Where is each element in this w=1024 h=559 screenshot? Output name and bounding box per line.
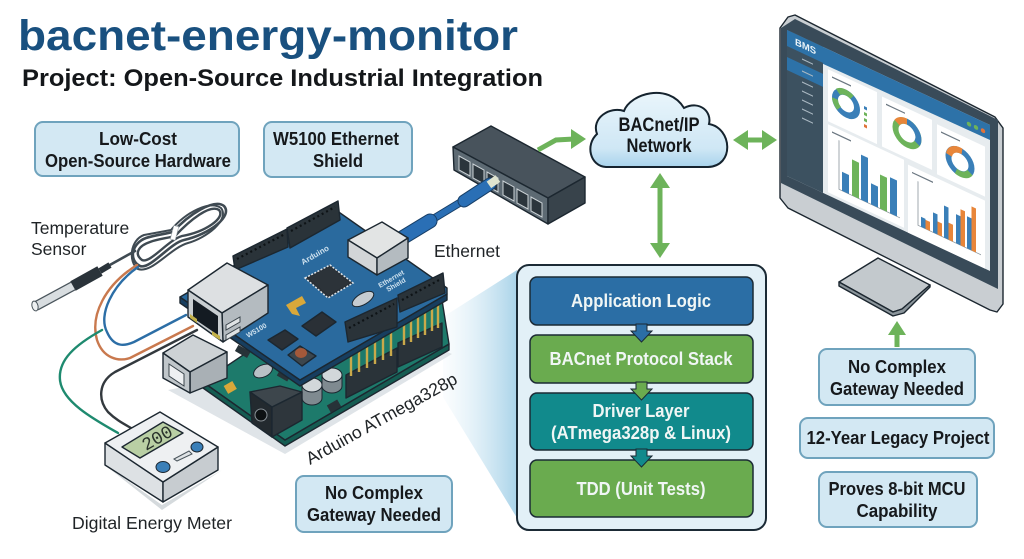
- bar chart 2: [908, 165, 985, 269]
- sensor wires: [60, 265, 197, 433]
- callout: no gateway (right): [819, 349, 975, 405]
- arrow: cloud to stack: [650, 173, 670, 258]
- cloud: BACnet/IP network: [590, 93, 727, 167]
- small RJ45 jack on shield: [348, 222, 408, 275]
- lower pin headers: [346, 323, 442, 398]
- label: Ethernet: Ethernet: [434, 241, 500, 261]
- callout: 8-bit MCU: Capability: [856, 500, 938, 521]
- callout: low-cost hardware: Low-Cost: [99, 128, 177, 149]
- layer: driver layer: [530, 393, 753, 450]
- callout: low-cost hardware: Open-Source Hardware: [45, 150, 231, 171]
- icon: digital energy meter: [101, 412, 222, 510]
- label: digital energy meter: Digital Energy Meter: [72, 513, 232, 533]
- label: temperature sensor: Sensor: [31, 239, 87, 259]
- layer: application logic: [530, 277, 753, 325]
- blue Ethernet cable: [402, 199, 466, 238]
- icon: network switch: [453, 126, 585, 224]
- callout: no gateway (bottom): Gateway Needed: [307, 504, 441, 525]
- bar chart 1: [828, 124, 904, 228]
- callout: 8-bit MCU: [819, 472, 977, 527]
- shield board: [180, 208, 447, 386]
- label: Arduino ATmega328p: Arduino ATmega328p: [302, 369, 461, 468]
- arrow: switch to cloud: [538, 129, 586, 150]
- donut panel 1: [828, 69, 877, 144]
- layer: driver layer: Driver Layer: [592, 400, 690, 421]
- silkscreen: [246, 244, 407, 340]
- donut panel 3: [937, 124, 985, 197]
- callout: no gateway (right): Gateway Needed: [830, 378, 964, 399]
- bezel: [781, 19, 998, 289]
- panel: software stack: [517, 265, 766, 530]
- callout: 8-bit MCU: Proves 8-bit MCU: [828, 478, 966, 499]
- subtitle: Project: Open-Source Industrial Integration: [22, 65, 543, 92]
- callout: W5100 shield: Shield: [313, 150, 363, 171]
- layer: BACnet protocol stack: [530, 335, 753, 383]
- callout: no gateway (bottom): [296, 476, 452, 532]
- screen: BMS: [795, 37, 816, 58]
- monitor body: [780, 15, 1003, 312]
- callout: low-cost hardware: [35, 122, 239, 176]
- layer: application logic: Application Logic: [571, 290, 711, 311]
- screen: [787, 30, 990, 271]
- label: temperature sensor: [31, 218, 129, 259]
- cloud: BACnet/IP network: Network: [626, 136, 692, 157]
- callout: W5100 shield: [264, 122, 412, 177]
- barrel jack: [250, 386, 302, 437]
- arrow: cloud to BMS: [733, 130, 777, 150]
- shield headers: [233, 201, 445, 342]
- icon: digital energy meter: 200: [139, 423, 177, 456]
- callout: no gateway (bottom): No Complex: [325, 482, 424, 503]
- USB-B connector: [163, 335, 227, 393]
- silkscreen: W5100: [246, 323, 268, 340]
- silkscreen: Arduino: [300, 244, 331, 267]
- big RJ45 jack: [188, 263, 268, 342]
- microcontroller: [305, 265, 353, 298]
- connector arrow 2: [631, 382, 652, 400]
- callout: no gateway (right): No Complex: [848, 356, 947, 377]
- label: temperature sensor: Temperature: [31, 218, 129, 238]
- icon: temperature sensor: [31, 204, 226, 312]
- silkscreen: Ethernet: [378, 269, 406, 290]
- layer: driver layer: (ATmega328p & Linux): [551, 422, 731, 443]
- layer: TDD: TDD (Unit Tests): [576, 478, 706, 499]
- stacking pins: [351, 302, 438, 376]
- callout: 12-year legacy: [800, 418, 994, 458]
- arrow: callouts to monitor: [888, 321, 906, 347]
- layer: BACnet protocol stack: BACnet Protocol Stack: [550, 348, 733, 369]
- icon: Arduino board with Ethernet shield: [163, 201, 452, 454]
- title: bacnet-energy-monitor: [18, 12, 518, 60]
- donut panel 2: [882, 96, 932, 170]
- callout: W5100 shield: W5100 Ethernet: [273, 128, 399, 149]
- SMD chips, button and crystal: [268, 288, 376, 366]
- connector arrow 3: [631, 449, 652, 467]
- callout: 12-year legacy: 12-Year Legacy Project: [806, 427, 990, 448]
- capacitors: [302, 368, 342, 405]
- layer: TDD: [530, 460, 753, 517]
- base board: [168, 290, 452, 454]
- callout wedge linking board to stack: [443, 270, 517, 518]
- stand: [839, 258, 930, 316]
- connector arrow 1: [631, 324, 652, 342]
- silkscreen: Shield: [386, 277, 407, 294]
- cloud: BACnet/IP network: BACnet/IP: [618, 115, 700, 136]
- icon: BMS monitor: [780, 15, 1003, 316]
